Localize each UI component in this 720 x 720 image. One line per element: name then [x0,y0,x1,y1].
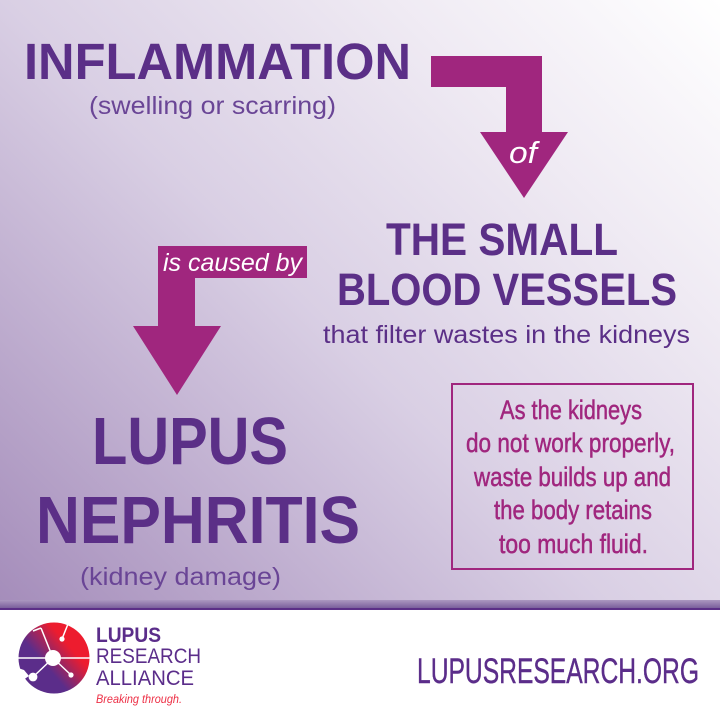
heading: lupus nephritis: (kidney damage) [80,563,281,591]
logo wordmark [96,624,201,706]
callout: kidney explanation: the body retains [494,495,652,525]
logo wordmark: RESEARCH [96,645,201,668]
arrow: of [431,56,568,198]
heading: lupus nephritis [36,404,360,591]
callout: kidney explanation: too much fluid. [499,529,648,559]
logo wordmark: LUPUS [96,624,161,647]
arrow: of: of [509,135,541,170]
heading: inflammation: (swelling or scarring) [89,92,336,120]
heading: lupus nephritis: NEPHRITIS [36,483,360,558]
footer panel [0,610,720,720]
heading: the small blood vessels [323,214,690,349]
heading: the small blood vessels: THE SMALL [386,214,618,265]
footer divider band [0,600,720,610]
callout: kidney explanation: As the kidneys [500,395,642,425]
callout: kidney explanation: waste builds up and [473,462,671,492]
heading: the small blood vessels: that filter wastes in the kidneys [323,321,690,349]
arrow: is caused by: is caused by [163,249,303,277]
heading: the small blood vessels: BLOOD VESSELS [337,264,677,315]
callout: kidney explanation [452,384,693,569]
logo wordmark: ALLIANCE [96,667,194,690]
heading: lupus nephritis: LUPUS [92,404,288,479]
logo wordmark: Breaking through. [96,692,182,706]
heading: inflammation [24,33,411,120]
heading: inflammation: INFLAMMATION [24,33,411,90]
callout: kidney explanation: do not work properly, [466,428,675,458]
icon: lupus research alliance logo [17,622,91,694]
arrow: is caused by [133,246,307,395]
